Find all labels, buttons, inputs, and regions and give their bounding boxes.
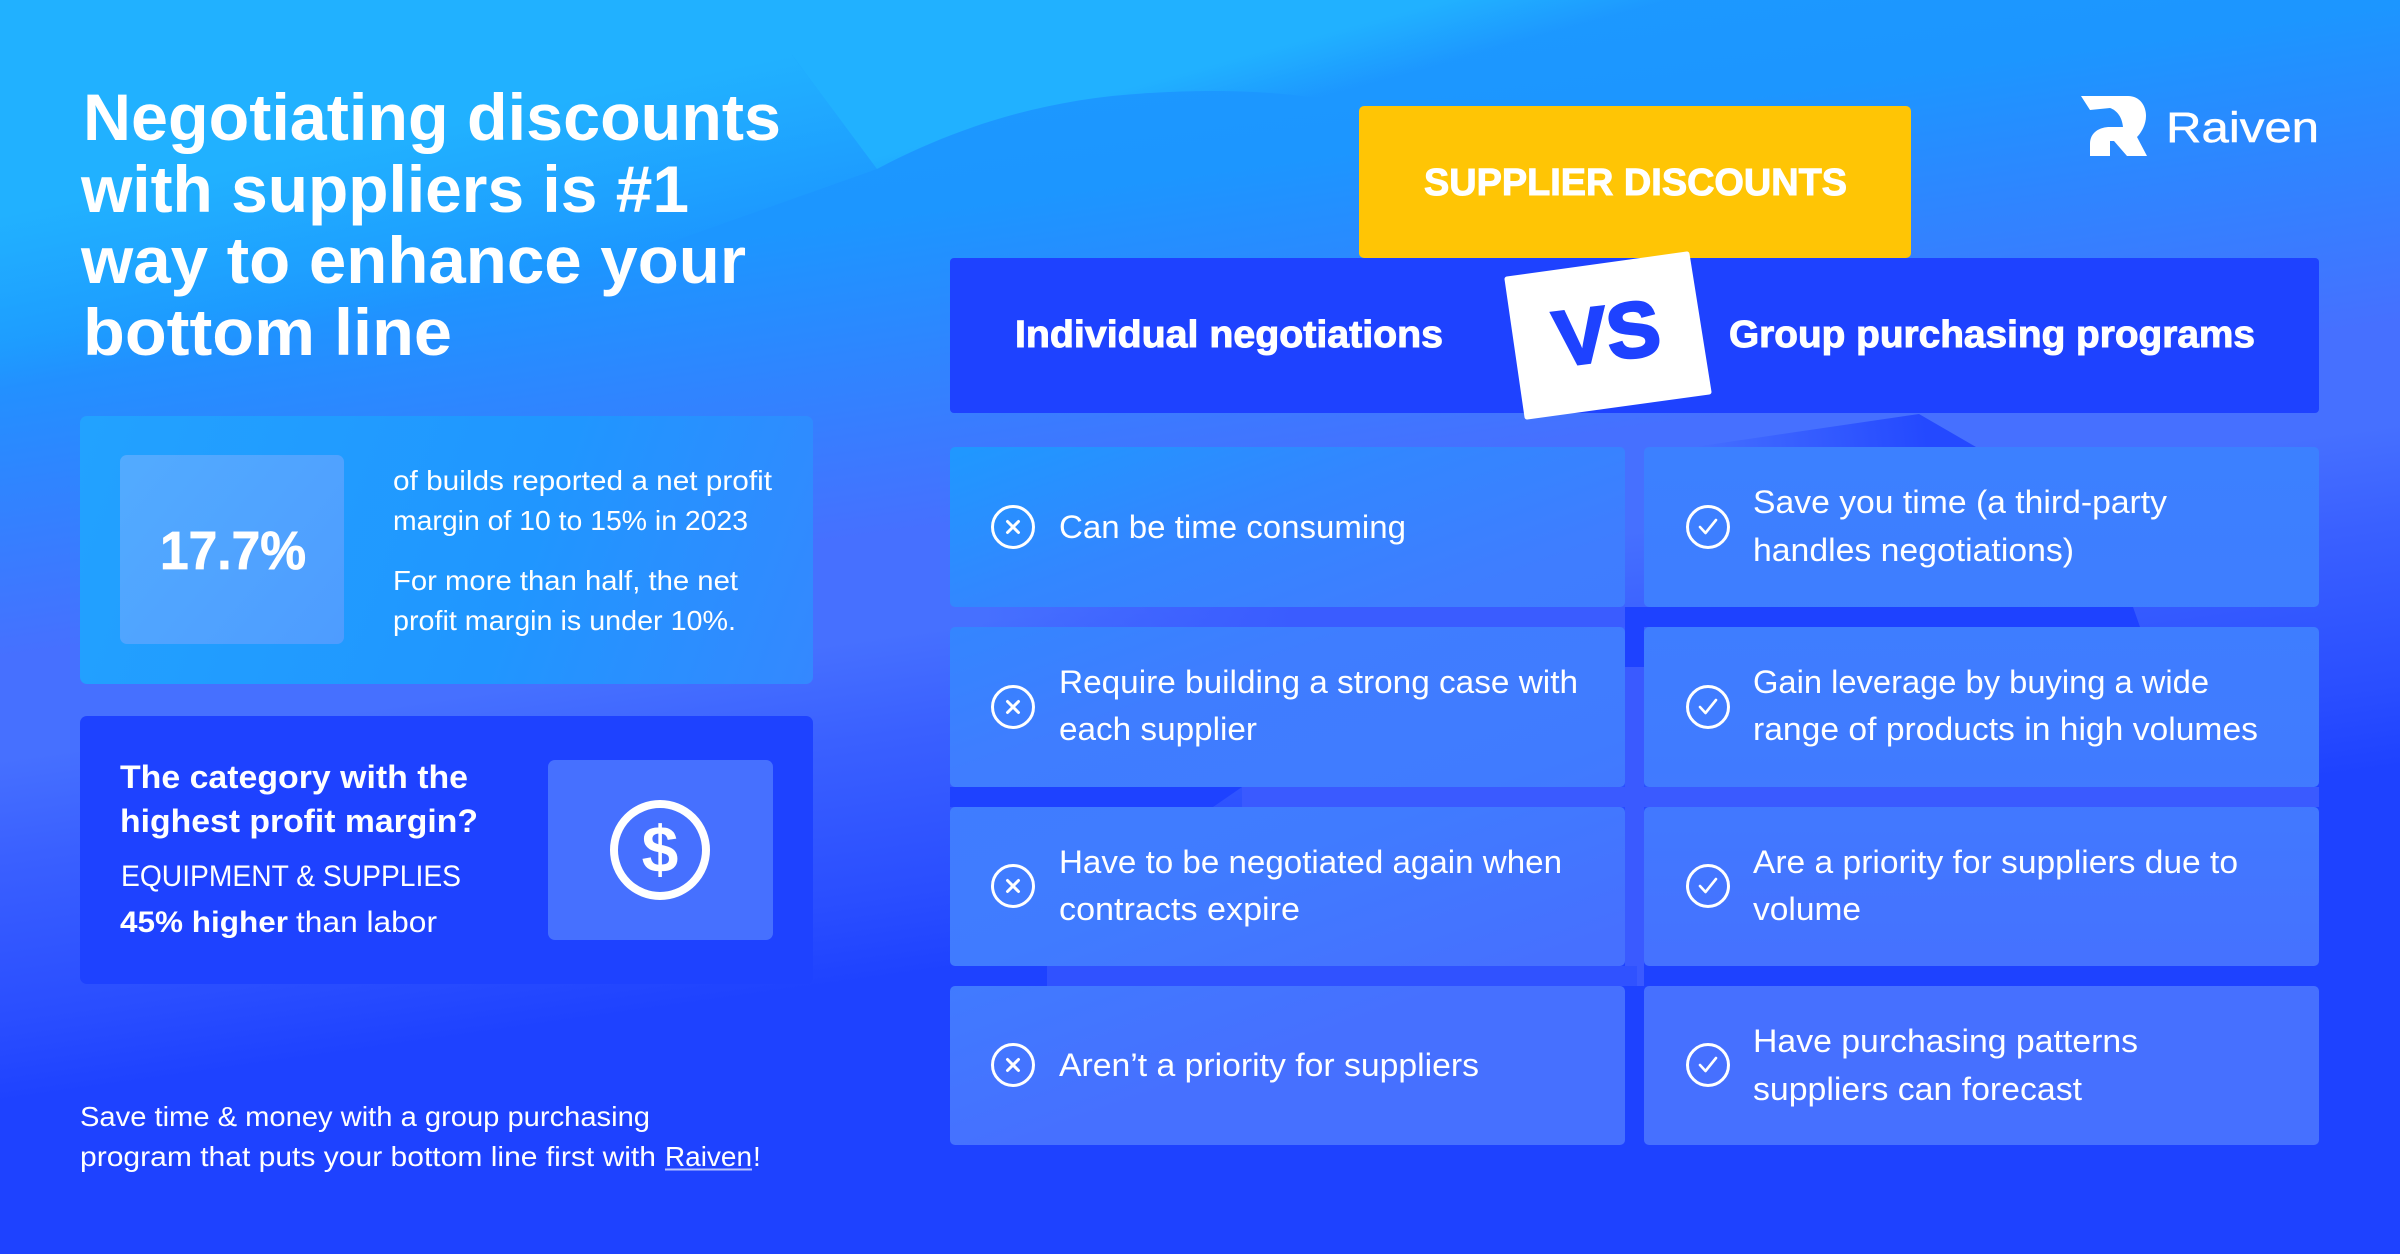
row 2 left: Require building a strong case with [1059,664,1578,700]
icon: check [1688,686,1728,728]
category text: than labor [296,906,437,939]
comparison header: Individual negotiations [1015,314,1443,356]
call to action: Save time & money with a group purchasing [80,1101,650,1132]
title: with suppliers is #1 [80,152,689,226]
stat description [393,465,772,636]
icon: cross [992,506,1034,548]
category text [120,759,478,939]
title [80,80,781,369]
title: way to enhance your [80,223,746,297]
category text: highest profit margin? [120,803,478,839]
row 2 right: range of products in high volumes [1753,711,2258,747]
stat box: 17.7% [120,455,344,644]
call to action: program that puts your bottom line first with [80,1141,656,1172]
stat description: of builds reported a net profit [393,465,772,496]
icon: dollar coin [548,760,773,940]
logo: Raiven [2081,96,2319,156]
title: bottom line [83,295,452,369]
icon: check [1688,866,1728,906]
supplier discounts tab [1359,106,1911,258]
stat description: profit margin is under 10%. [393,605,736,636]
row 1 right: handles negotiations) [1753,532,2074,568]
vs badge [1507,254,1709,417]
row 2 right [1644,627,2319,787]
row 3 right: volume [1753,891,1861,927]
logo: Raiven: Raiven [2166,104,2319,152]
stat box: 17.7%: 17.7% [160,521,306,581]
row 4 right: Have purchasing patterns [1753,1023,2138,1059]
icon: cross [992,1044,1034,1086]
comparison header [950,258,2319,413]
row 1 right [1644,447,2319,607]
row 1 left: Can be time consuming [1059,509,1406,545]
row 4 left [950,986,1625,1145]
icon: cross [992,686,1034,728]
icon: check [1688,1044,1728,1086]
row 1 left [950,447,1625,607]
row 3 left: contracts expire [1059,891,1300,927]
row 2 right: Gain leverage by buying a wide [1753,664,2209,700]
row 4 right: suppliers can forecast [1753,1071,2082,1107]
row 1 right: Save you time (a third-party [1753,484,2167,520]
panel: net profit stat [80,416,813,684]
call to action: Raiven [665,1141,752,1172]
title: Negotiating discounts [83,80,781,154]
row 4 right [1644,986,2319,1145]
call to action: ! [753,1141,761,1172]
row 3 left: Have to be negotiated again when [1059,844,1562,880]
icon: check [1688,506,1728,548]
call to action [80,1101,761,1172]
category text: 45% higher [120,906,288,939]
category text: EQUIPMENT & SUPPLIES [121,860,461,893]
comparison header: Group purchasing programs [1729,314,2255,356]
row 3 right [1644,807,2319,966]
icon: cross [992,866,1034,906]
row 2 left [950,627,1625,787]
row 3 left [950,807,1625,966]
stat description: margin of 10 to 15% in 2023 [393,505,748,536]
supplier discounts tab: SUPPLIER DISCOUNTS [1424,162,1847,204]
row 2 left: each supplier [1059,711,1257,747]
category text: The category with the [120,759,468,795]
vs badge: VS [1549,283,1665,383]
icon: dollar coin: $ [642,812,678,886]
row 4 left: Aren’t a priority for suppliers [1059,1047,1479,1083]
stat description: For more than half, the net [393,565,738,596]
row 3 right: Are a priority for suppliers due to [1753,844,2238,880]
panel: highest profit margin category [80,716,813,984]
